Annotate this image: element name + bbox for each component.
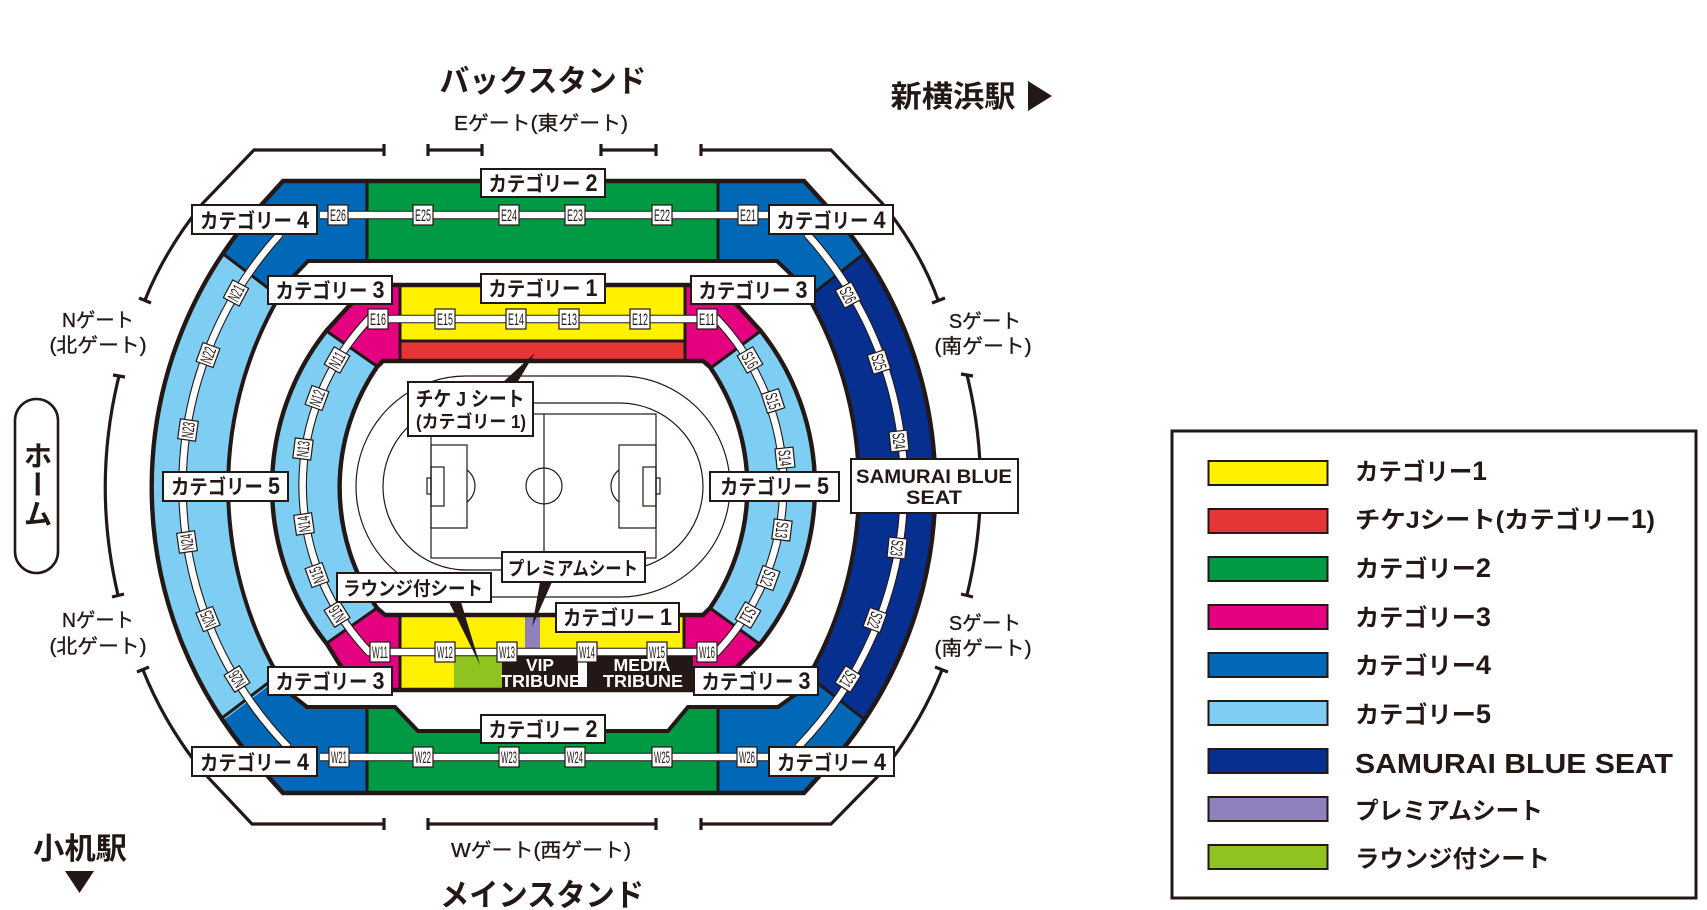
gate labels north and south: (南ゲート) bbox=[934, 335, 1032, 358]
label: category 5 right: カテゴリー 5 bbox=[720, 473, 829, 500]
legend: category 2: カテゴリー2 bbox=[1355, 553, 1491, 583]
label: category 4 bottom right: カテゴリー 4 bbox=[777, 749, 887, 776]
gate tags: lower E row: E12 bbox=[632, 310, 648, 329]
legend: lounge seat bbox=[1208, 845, 1550, 873]
gate tags: inner W row: W14 bbox=[579, 643, 595, 662]
legend: premium seat: プレミアムシート bbox=[1355, 798, 1543, 825]
gate tags: outer N side: N22 bbox=[197, 344, 220, 366]
category 1 upper bbox=[400, 285, 685, 341]
label: E gate: Eゲート(東ゲート) bbox=[454, 112, 628, 135]
gate tags: outer N side: N26 bbox=[225, 667, 250, 691]
label: category 4 bottom left: カテゴリー 4 bbox=[200, 749, 310, 776]
gate tags: inner N side: N15 bbox=[306, 564, 329, 586]
gate tags: inner W row: W13 bbox=[499, 643, 515, 662]
label: category 2 bottom: カテゴリー 2 bbox=[488, 716, 598, 743]
gate tags: inner W row: W15 bbox=[649, 643, 665, 662]
gate tracks bbox=[182, 215, 904, 757]
label: lounge seat: ラウンジ付シート bbox=[343, 578, 483, 600]
tribune labels bbox=[501, 655, 683, 691]
gate tags: inner S side: S11 bbox=[735, 603, 760, 626]
gate labels north and south: Nゲート bbox=[62, 309, 134, 332]
label: category 4 top right: カテゴリー 4 bbox=[776, 207, 886, 234]
label: ticket J seat: (カテゴリー 1) bbox=[416, 411, 526, 432]
gate tags: lower W row: W26 bbox=[739, 748, 755, 767]
label: category 3 top left: カテゴリー 3 bbox=[276, 277, 384, 304]
gate tags: inner S side: S12 bbox=[756, 567, 779, 589]
tribune labels: VIP bbox=[526, 655, 554, 675]
home pill bbox=[15, 399, 58, 573]
athletics track bbox=[356, 376, 730, 597]
gate tags: inner N side bbox=[293, 347, 351, 627]
label: ticket J seat bbox=[408, 382, 533, 436]
gate tags: lower W row: W21 bbox=[331, 748, 347, 767]
legend: category 5: カテゴリー5 bbox=[1355, 699, 1491, 729]
premium seat bbox=[525, 617, 540, 648]
gate tags: inner W row: W11 bbox=[372, 643, 388, 662]
gate tags: outer N side: N23 bbox=[178, 421, 199, 439]
label: samurai blue seat: SEAT bbox=[906, 488, 962, 509]
category labels bbox=[163, 169, 1018, 776]
gate tags: inner W row: W16 bbox=[699, 643, 715, 662]
legend: samurai blue seat: SAMURAI BLUE SEAT bbox=[1355, 748, 1673, 779]
gate tags: upper E row: E24 bbox=[501, 206, 517, 225]
label: samurai blue seat: SAMURAI BLUE bbox=[856, 467, 1012, 488]
legend: ticket J seat bbox=[1208, 504, 1655, 534]
gate tags: lower W row: W22 bbox=[415, 748, 431, 767]
legend: category 3 bbox=[1208, 602, 1491, 632]
gate tags: outer S side: S26 bbox=[835, 284, 860, 307]
gate labels north and south: Sゲート bbox=[949, 310, 1021, 333]
pitch and athletics track bbox=[356, 376, 730, 597]
gate tags: lower W row: W25 bbox=[654, 748, 670, 767]
gate tags: lower W row: W24 bbox=[567, 748, 583, 767]
gate range brackets bbox=[105, 144, 980, 830]
legend panel bbox=[1172, 431, 1696, 898]
label: category 5 left: カテゴリー 5 bbox=[171, 473, 280, 500]
gate tags: lower E row: E11 bbox=[699, 310, 715, 329]
gate tags: outer S side: S23 bbox=[886, 539, 907, 557]
gate labels north and south: Sゲート bbox=[949, 612, 1021, 635]
gate tags: lower W row: W23 bbox=[501, 748, 517, 767]
gate tags: inner W row: W12 bbox=[437, 643, 453, 662]
legend: premium seat bbox=[1208, 797, 1543, 825]
inner tier dividers bbox=[325, 285, 762, 690]
gate tags: upper E row: E26 bbox=[330, 206, 346, 225]
gate labels north and south: (南ゲート) bbox=[934, 637, 1032, 660]
gate tags: outer S side: S22 bbox=[863, 609, 886, 631]
gate tags: lower W row bbox=[329, 747, 757, 767]
tribune labels: TRIBUNE bbox=[603, 671, 683, 691]
gate tags: lower E row: E14 bbox=[508, 310, 524, 329]
gate tags: inner S side bbox=[734, 347, 795, 628]
gate tags: inner S side: S13 bbox=[771, 521, 792, 539]
legend: category 1 bbox=[1208, 456, 1487, 486]
gate tags: inner S side: S16 bbox=[737, 349, 762, 372]
legend: samurai blue seat bbox=[1208, 748, 1673, 779]
label: samurai blue seat bbox=[851, 459, 1018, 513]
gate tags: upper E row: E21 bbox=[740, 206, 756, 225]
gate tags: inner N side: N13 bbox=[293, 440, 314, 458]
label: premium seat: プレミアムシート bbox=[508, 558, 638, 580]
gate tags: lower E row: E13 bbox=[561, 310, 577, 329]
gate tags: outer N side bbox=[177, 280, 251, 692]
inner tier outlines bbox=[272, 285, 815, 690]
label: category 3 bottom left: カテゴリー 3 bbox=[276, 668, 384, 695]
tribune block bbox=[502, 656, 693, 688]
gate labels north and south: (北ゲート) bbox=[50, 635, 146, 658]
arrow: to Shin-Yokohama station bbox=[1028, 81, 1052, 111]
label: lounge seat bbox=[337, 573, 491, 602]
gate tags: outer S side: S25 bbox=[867, 352, 890, 373]
gate tags: inner S side: S14 bbox=[774, 449, 795, 467]
legend: category 1: カテゴリー1 bbox=[1355, 456, 1487, 486]
gate labels north and south: (北ゲート) bbox=[50, 334, 146, 357]
label: category 2 top: カテゴリー 2 bbox=[488, 170, 598, 197]
tribune labels: MEDIA bbox=[614, 655, 671, 675]
gate tags: outer N side: N21 bbox=[224, 282, 249, 305]
gate tags: outer S side: S24 bbox=[888, 432, 909, 450]
ticket J seat bbox=[402, 342, 684, 359]
label: premium seat bbox=[502, 552, 645, 582]
legend: category 4: カテゴリー4 bbox=[1355, 650, 1491, 680]
white stub between tribunes bbox=[578, 660, 587, 687]
tribune labels: TRIBUNE bbox=[501, 671, 581, 691]
gate labels north and south bbox=[50, 309, 1032, 660]
gate tags: outer S side: S21 bbox=[835, 667, 860, 691]
gate tags: upper E row: E25 bbox=[415, 206, 431, 225]
label: category 3 top right: カテゴリー 3 bbox=[698, 277, 808, 304]
gate tags: upper E row: E23 bbox=[567, 206, 583, 225]
gate tags: inner W row bbox=[370, 642, 717, 662]
seating bowl bbox=[130, 170, 958, 810]
gate tags: outer S side bbox=[834, 282, 909, 692]
outer tier outline and inner void bbox=[152, 181, 935, 793]
gate tags: lower E row bbox=[368, 309, 717, 329]
gate tags: inner N side: N14 bbox=[294, 515, 315, 533]
category 1 lower bbox=[402, 617, 682, 688]
label: Kozukue station: 小机駅 bbox=[33, 833, 127, 866]
gate tags: outer N side: N24 bbox=[177, 533, 198, 551]
outer tier dividers bbox=[222, 181, 865, 793]
home pill: ホーム bbox=[19, 441, 52, 528]
gate tags: inner N side: N12 bbox=[306, 387, 329, 409]
gate tags: inner N side: N16 bbox=[325, 602, 350, 626]
legend: category 4 bbox=[1208, 650, 1491, 680]
gate tags: inner S side: S15 bbox=[761, 391, 784, 412]
arrow: to Kozukue station bbox=[65, 871, 94, 893]
inner tier: category 5 base bbox=[274, 287, 812, 688]
gate tags: outer N side: N25 bbox=[197, 608, 220, 630]
label: category 1 top: カテゴリー 1 bbox=[488, 275, 598, 302]
label: category 4 top left: カテゴリー 4 bbox=[200, 207, 310, 234]
label: category 1 bottom: カテゴリー 1 bbox=[563, 604, 672, 631]
gate tags: lower E row: E15 bbox=[437, 310, 453, 329]
callout pointers bbox=[449, 353, 552, 665]
gate labels north and south: Nゲート bbox=[62, 609, 134, 632]
label: W gate: Wゲート(西ゲート) bbox=[451, 839, 631, 862]
gate tags: lower E row: E16 bbox=[370, 310, 386, 329]
legend: ticket J seat: チケJシート(カテゴリー 1) bbox=[1355, 504, 1655, 534]
football pitch bbox=[431, 414, 656, 558]
label: Shin-Yokohama station: 新横浜駅 bbox=[890, 81, 1016, 114]
gate tags: upper E row: E22 bbox=[654, 206, 670, 225]
gate tags: inner N side: N11 bbox=[325, 349, 350, 372]
legend: category 2 bbox=[1208, 553, 1491, 583]
lounge seat bbox=[454, 656, 502, 688]
legend: category 5 bbox=[1208, 699, 1491, 729]
label: category 3 bottom right: カテゴリー 3 bbox=[702, 668, 811, 695]
label: ticket J seat: チケ J シート bbox=[416, 388, 524, 411]
gate tags: upper E row bbox=[328, 205, 758, 225]
outer tier: category 5 and samurai blue base bbox=[154, 183, 932, 791]
legend: category 3: カテゴリー3 bbox=[1355, 602, 1491, 632]
title: back stand: バックスタンド bbox=[440, 64, 646, 99]
pitch void bbox=[340, 361, 747, 615]
legend: lounge seat: ラウンジ付シート bbox=[1355, 846, 1550, 873]
